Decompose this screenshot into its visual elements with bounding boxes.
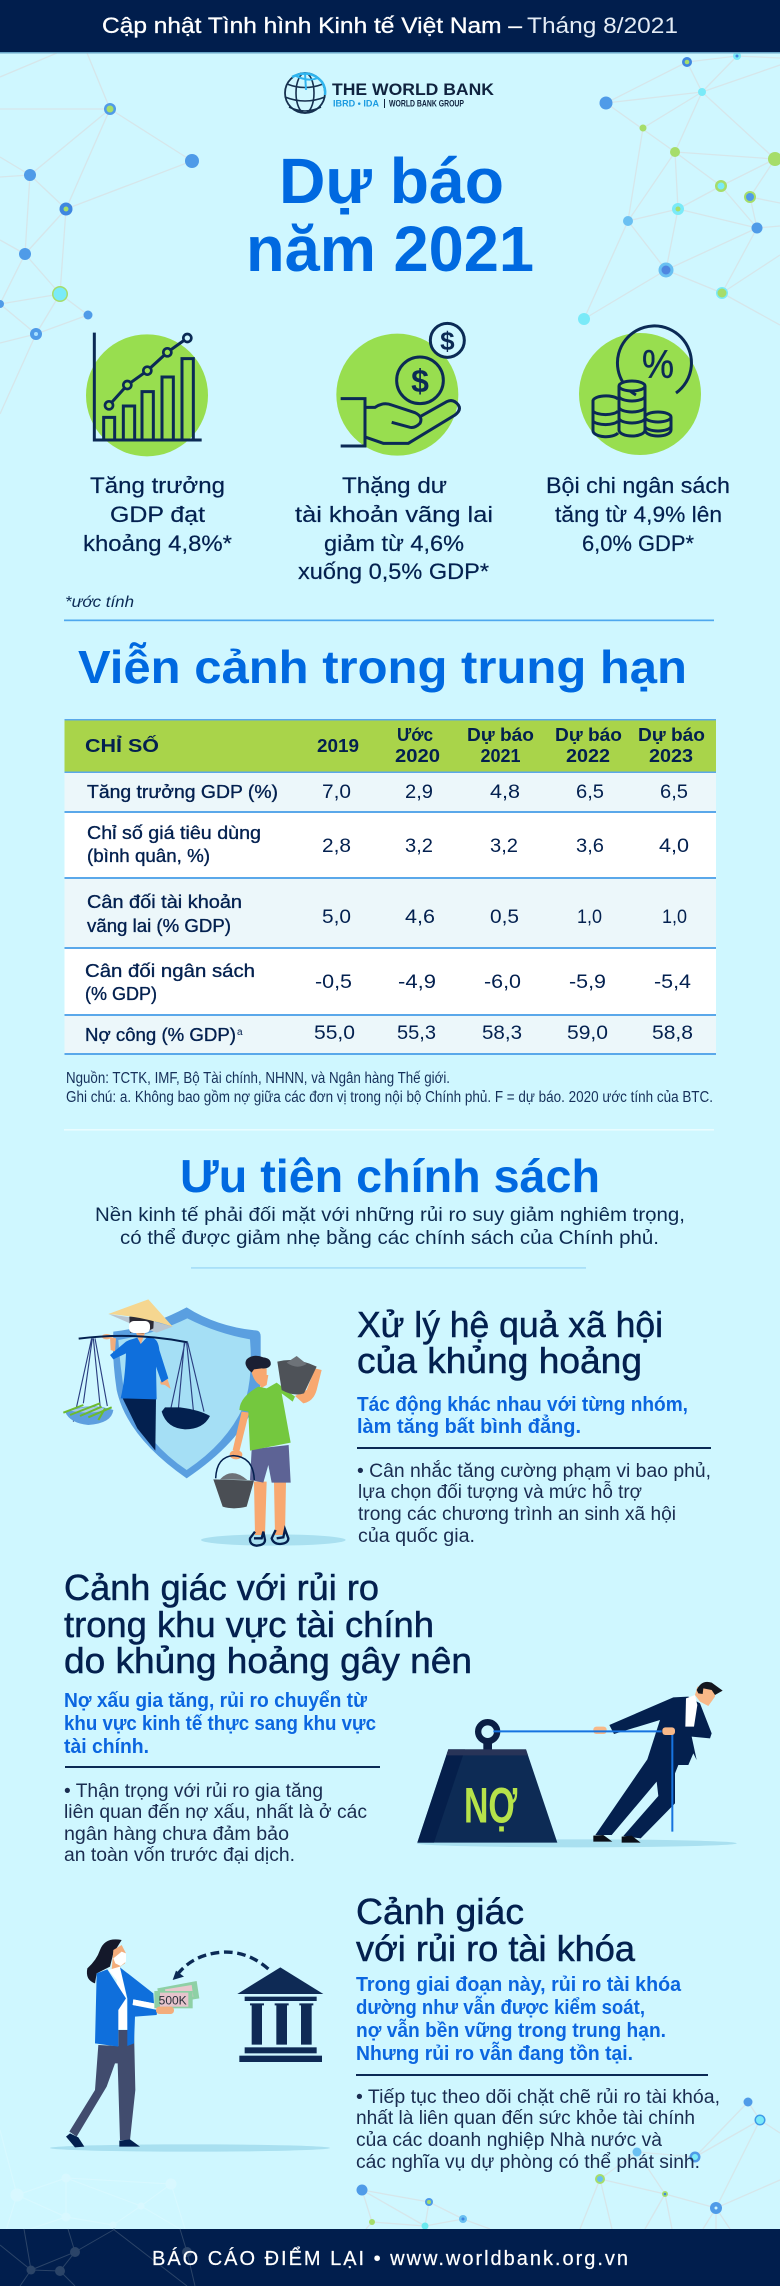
man carrying bag and bucket <box>201 1356 346 1546</box>
row: budget balance: -5,4 <box>654 972 691 993</box>
arrow <box>173 1952 268 1980</box>
row: GDP growth: 6,5 <box>576 782 604 803</box>
row: consumer price index: 2,8 <box>322 836 351 857</box>
logo: The World Bank: THE WORLD BANK <box>332 80 495 99</box>
network decoration: bottom right <box>356 2098 780 2230</box>
icon: percent and coin stacks <box>579 326 701 455</box>
table header row: 2022 <box>566 746 610 766</box>
row: public debt: a <box>237 1027 243 1038</box>
row: budget balance: Cân đối ngân sách <box>85 961 255 981</box>
logo: The World Bank: WORLD BANK GROUP <box>389 98 464 108</box>
row: consumer price index: 4,0 <box>659 836 689 857</box>
row: current account balance: vãng lai (% GDP) <box>87 916 231 936</box>
source note <box>66 1070 713 1106</box>
weight: NỢ <box>464 1778 518 1834</box>
text: current account surplus: giảm từ 4,6% <box>324 531 464 556</box>
table: indicators <box>64 719 716 1055</box>
banknotes: 500K <box>159 1994 187 2008</box>
heading <box>64 1567 472 1681</box>
text: GDP growth: Tăng trưởng <box>90 473 225 498</box>
bullet <box>64 1781 367 1866</box>
row: consumer price index: (bình quân, %) <box>87 846 210 866</box>
header bar <box>0 0 780 54</box>
text: current account surplus: xuống 0,5% GDP* <box>298 559 489 584</box>
intro text: Nền kinh tế phải đối mặt với những rủi ro suy giảm nghiêm trọng, <box>95 1204 685 1226</box>
row: budget balance: (% GDP) <box>85 984 157 1004</box>
illustration: woman vendor, man with buckets and shield <box>63 1299 346 1546</box>
heading <box>356 1891 636 1969</box>
heading: Cảnh giác <box>356 1891 524 1932</box>
bullet: nhất là liên quan đến sức khỏe tài chính <box>356 2108 695 2129</box>
row: public debt: 55,0 <box>314 1023 355 1044</box>
text: budget deficit <box>546 473 730 556</box>
row: current account balance: 1,0 <box>577 907 602 928</box>
row: GDP growth: 6,5 <box>660 782 688 803</box>
title <box>246 145 534 285</box>
blue summary: khu vực kinh tế thực sang khu vực <box>64 1713 376 1735</box>
icon: bank building <box>237 1967 323 2062</box>
row: budget balance: -4,9 <box>398 972 436 993</box>
man in suit <box>593 1682 723 1843</box>
row: budget balance <box>85 961 691 1004</box>
bullet: liên quan đến nợ xấu, nhất là ở các <box>64 1802 367 1823</box>
text: current account surplus: tài khoản vãng lai <box>295 502 493 527</box>
woman with carrying pole <box>63 1299 210 1451</box>
woman in mask <box>66 1939 157 2147</box>
blue summary: dường như vẫn được kiểm soát, <box>356 1995 645 2019</box>
row: current account balance: 4,6 <box>405 907 435 928</box>
bullet: các nghĩa vụ dự phòng có thể phát sinh. <box>356 2152 700 2173</box>
heading: policy priorities: Ưu tiên chính sách <box>180 1150 600 1202</box>
icon: hand with dollar coins <box>336 323 464 456</box>
icon: hand with dollar coins: $ <box>411 363 429 399</box>
header title: Cập nhật Tình hình Kinh tế Việt Nam – <box>102 13 523 38</box>
bullet: an toàn vốn trước đại dịch. <box>64 1845 295 1866</box>
blue summary: nợ vẫn bền vững trong trung hạn. <box>356 2018 666 2042</box>
heading: với rủi ro tài khóa <box>356 1928 636 1969</box>
icon: globe <box>285 73 325 113</box>
row: current account balance: 0,5 <box>490 907 519 928</box>
table header row: 2021 <box>480 746 520 766</box>
blue summary <box>357 1394 688 1438</box>
banknotes <box>154 1981 199 2014</box>
heading: trong khu vực tài chính <box>64 1604 434 1645</box>
row: GDP growth: Tăng trưởng GDP (%) <box>87 782 278 802</box>
illustration: woman receiving money from bank <box>50 1939 330 2152</box>
logo: The World Bank: IBRD • IDA <box>333 98 379 110</box>
heading: do khủng hoảng gây nên <box>64 1640 472 1681</box>
source note: Nguồn: TCTK, IMF, Bộ Tài chính, NHNN, và Ngân hàng Thế giới. <box>66 1070 450 1087</box>
text: budget deficit: tăng từ 4,9% lên <box>555 502 722 527</box>
blue summary: làm tăng bất bình đẳng. <box>357 1414 581 1438</box>
blue summary: Trong giai đoạn này, rủi ro tài khóa <box>356 1974 682 1996</box>
row: consumer price index: Chỉ số giá tiêu dùng <box>87 823 261 843</box>
blue summary: tài chính. <box>64 1736 149 1758</box>
row: current account balance <box>87 892 687 936</box>
row: public debt: Nợ công (% GDP) <box>85 1025 236 1045</box>
row: current account balance: 1,0 <box>662 907 687 928</box>
text: budget deficit: Bội chi ngân sách <box>546 473 730 498</box>
row: budget balance: -5,9 <box>569 972 606 993</box>
section text: financial risk <box>64 1567 472 1866</box>
row: public debt: 58,8 <box>652 1023 693 1044</box>
row: consumer price index <box>87 823 689 866</box>
table header row: 2020 <box>395 746 440 766</box>
bullet: trong các chương trình an sinh xã hội <box>358 1504 676 1525</box>
row: current account balance: 5,0 <box>322 907 351 928</box>
section text: social consequences <box>357 1304 711 1547</box>
row: public debt: 55,3 <box>397 1023 436 1044</box>
bullet: • Cân nhắc tăng cường phạm vi bao phủ, <box>357 1460 711 1482</box>
table header row: 2019 <box>317 736 359 756</box>
row: GDP growth: 7,0 <box>322 782 351 803</box>
icon: GDP growth chart <box>86 333 208 456</box>
intro text: có thể được giảm nhẹ bằng các chính sách của Chính phủ. <box>120 1226 659 1249</box>
bullet: của các doanh nghiệp Nhà nước và <box>356 2130 662 2151</box>
footer text: BÁO CÁO ĐIỂM LẠI • www.worldbank.org.vn <box>152 2247 628 2270</box>
blue summary: Tác động khác nhau với từng nhóm, <box>357 1394 688 1416</box>
text: current account surplus <box>295 473 493 584</box>
text: GDP growth: khoảng 4,8%* <box>83 531 232 556</box>
illustration: man pulling debt weight <box>417 1682 737 1847</box>
row: budget balance: -6,0 <box>484 972 521 993</box>
rope <box>493 1731 672 1832</box>
table header row: Dự báo <box>638 725 705 745</box>
title: năm 2021 <box>246 213 534 285</box>
header date: Tháng 8/2021 <box>527 13 678 38</box>
heading: Xử lý hệ quả xã hội <box>357 1304 663 1345</box>
footnote: estimate: *ước tính <box>65 594 134 611</box>
heading <box>357 1304 663 1381</box>
blue summary <box>356 1974 682 2065</box>
intro text <box>95 1204 685 1249</box>
network decoration: top left <box>0 53 199 414</box>
bullet <box>357 1460 711 1547</box>
row: consumer price index: 3,2 <box>405 836 433 857</box>
footer bar <box>0 2229 780 2286</box>
row: budget balance: -0,5 <box>315 972 352 993</box>
section text: fiscal risk <box>356 1891 720 2173</box>
row: public debt <box>85 1023 693 1045</box>
table header row: Ước <box>397 725 433 745</box>
shield <box>113 1307 261 1478</box>
heading: Cảnh giác với rủi ro <box>64 1567 379 1608</box>
blue summary: Nhưng rủi ro vẫn đang tồn tại. <box>356 2041 633 2065</box>
row: GDP growth <box>87 782 688 803</box>
text: current account surplus: Thặng dư <box>342 473 447 498</box>
row: public debt: 59,0 <box>567 1023 608 1044</box>
bullet: ngân hàng chưa đảm bảo <box>64 1824 289 1845</box>
blue summary <box>64 1690 376 1758</box>
row: public debt: 58,3 <box>482 1023 522 1044</box>
table header row <box>85 725 705 766</box>
bullet: • Tiếp tục theo dõi chặt chẽ rủi ro tài khóa, <box>356 2087 720 2108</box>
title: Dự báo <box>279 145 504 217</box>
table header row: CHỈ SỐ <box>85 735 159 756</box>
row: GDP growth: 4,8 <box>490 782 520 803</box>
row: consumer price index: 3,6 <box>576 836 604 857</box>
logo: The World Bank <box>285 73 495 113</box>
table header row: Dự báo <box>555 725 622 745</box>
bullet <box>356 2087 720 2173</box>
table header row: Dự báo <box>467 725 534 745</box>
row: consumer price index: 3,2 <box>490 836 518 857</box>
bullet: của quốc gia. <box>358 1526 475 1547</box>
heading: medium-term outlook: Viễn cảnh trong trung hạn <box>78 641 687 693</box>
bullet: lựa chọn đối tượng và mức hỗ trợ <box>358 1481 642 1503</box>
network decoration: top right <box>578 52 780 325</box>
text: GDP growth: GDP đạt <box>110 502 205 527</box>
heading: của khủng hoảng <box>357 1340 642 1381</box>
blue summary: Nợ xấu gia tăng, rủi ro chuyển từ <box>64 1690 367 1712</box>
row: GDP growth: 2,9 <box>405 782 433 803</box>
icon: hand with dollar coins: $ <box>440 326 455 356</box>
weight <box>417 1722 557 1843</box>
icon: percent and coin stacks: % <box>642 343 674 387</box>
text: budget deficit: 6,0% GDP* <box>582 531 694 556</box>
row: current account balance: Cân đối tài khoản <box>87 892 242 912</box>
bullet: • Thận trọng với rủi ro gia tăng <box>64 1781 323 1802</box>
network decoration: faded bottom left <box>0 2130 185 2250</box>
table header row: 2023 <box>649 746 693 766</box>
text: GDP growth <box>83 473 232 556</box>
